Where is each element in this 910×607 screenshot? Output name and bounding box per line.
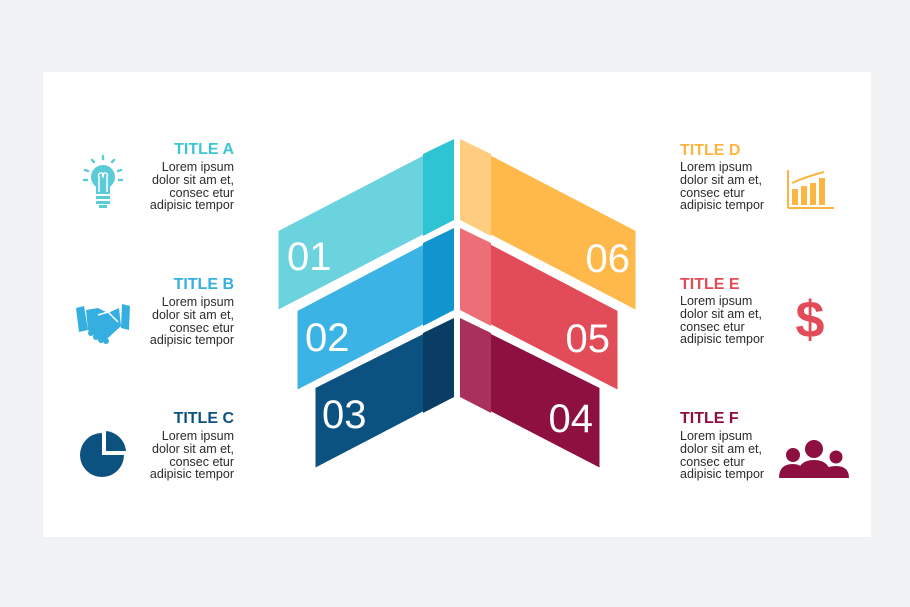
- text block A: dolor sit am et,: [152, 173, 234, 187]
- text block B: [150, 276, 234, 347]
- text block D: adipisic tempor: [680, 198, 764, 212]
- text block B: consec etur: [169, 321, 234, 335]
- chevron 03: [314, 317, 454, 470]
- chevron 06: 06: [586, 237, 630, 281]
- chevron 04: [460, 317, 601, 470]
- text block E: TITLE E: [680, 276, 740, 293]
- text block F: TITLE F: [680, 410, 739, 427]
- text block D: consec etur: [680, 186, 745, 200]
- text block C: [150, 410, 234, 481]
- chevron 05: 05: [566, 317, 610, 361]
- text block A: consec etur: [169, 186, 234, 200]
- text block F: Lorem ipsum: [680, 429, 752, 443]
- text block F: adipisic tempor: [680, 467, 764, 481]
- text block A: [150, 141, 234, 212]
- chevron 03: 03: [322, 393, 366, 437]
- icon: light bulb: [84, 156, 122, 208]
- text block F: consec etur: [680, 455, 745, 469]
- text block B: Lorem ipsum: [162, 295, 234, 309]
- text block C: adipisic tempor: [150, 467, 234, 481]
- text block A: Lorem ipsum: [162, 160, 234, 174]
- text block C: TITLE C: [174, 410, 234, 427]
- text block E: adipisic tempor: [680, 332, 764, 346]
- text block D: Lorem ipsum: [680, 160, 752, 174]
- chevron 06: [460, 138, 637, 312]
- text block F: dolor sit am et,: [680, 442, 762, 456]
- text block B: dolor sit am et,: [152, 308, 234, 322]
- chevron 04: 04: [548, 397, 593, 441]
- icon: bar chart growth: [788, 170, 834, 208]
- text block B: TITLE B: [174, 276, 234, 293]
- icon: people: [779, 440, 849, 478]
- chevron 01: 01: [287, 235, 332, 279]
- text block E: consec etur: [680, 320, 745, 334]
- text block B: adipisic tempor: [150, 333, 234, 347]
- text block C: Lorem ipsum: [162, 429, 234, 443]
- icon: handshake: [76, 304, 130, 344]
- text block E: [680, 276, 764, 346]
- text block E: Lorem ipsum: [680, 294, 752, 308]
- text block E: dolor sit am et,: [680, 307, 762, 321]
- text block A: adipisic tempor: [150, 198, 234, 212]
- icon: pie chart: [80, 431, 126, 477]
- chevron 02: 02: [305, 316, 350, 360]
- white card panel: [43, 72, 871, 537]
- chevron 01: [277, 138, 454, 312]
- text block F: [680, 410, 764, 481]
- text block D: [680, 142, 764, 212]
- text block A: TITLE A: [174, 141, 234, 158]
- icon: dollar: $: [796, 291, 825, 349]
- text block D: TITLE D: [680, 142, 740, 159]
- chevron 02: [296, 227, 454, 392]
- text block C: dolor sit am et,: [152, 442, 234, 456]
- text block D: dolor sit am et,: [680, 173, 762, 187]
- chevron 05: [460, 227, 619, 392]
- text block C: consec etur: [169, 455, 234, 469]
